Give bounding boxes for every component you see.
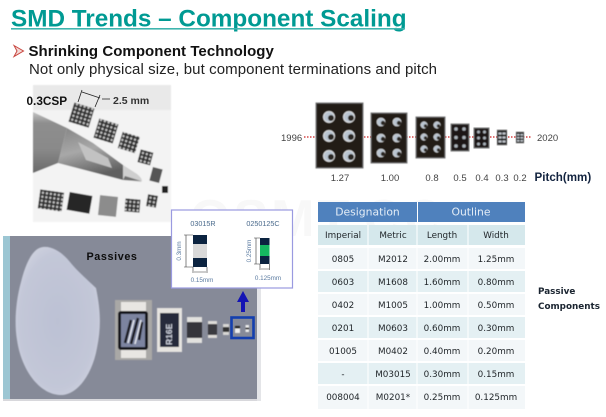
row 0805 [332, 255, 514, 265]
row 0805: 1.25mm [478, 255, 514, 265]
pitch values [331, 173, 527, 184]
axis label: pitch: Pitch(mm) [534, 171, 591, 184]
chip 0.8 [416, 117, 445, 158]
capacitor drawing: 0.25mm [246, 240, 253, 262]
heading: shrinking component technology: Shrinking Component Technology [28, 43, 274, 60]
text block: subheading: Not only physical size, but component terminations and pitch [29, 61, 437, 78]
row 0201 [332, 324, 514, 334]
row 01005: 0.20mm [478, 347, 514, 357]
title: SMD Trends – Component Scaling [11, 6, 407, 32]
packages [38, 103, 168, 217]
resistor drawing: 0.3mm [176, 241, 183, 261]
row 0201: 0.60mm [424, 324, 460, 334]
chip 0.3 [497, 130, 507, 145]
capacitor drawing [246, 238, 281, 282]
pitch values: 1.00 [381, 173, 399, 184]
table column headers [318, 225, 525, 245]
dimension marker: 2.5 mm: 2.5 mm [113, 95, 149, 107]
chip 0.2 [516, 132, 524, 143]
table column headers: Metric [379, 231, 407, 241]
label: passive components: Passive [538, 287, 575, 297]
table header: Designation [335, 206, 400, 218]
highlight box: smallest sizes [232, 318, 254, 338]
resistor drawing: 0.15mm [191, 277, 213, 284]
row 0201: M0603 [378, 324, 408, 334]
passive component sizes: R16E [164, 323, 174, 345]
row M03015: 0.15mm [478, 370, 514, 380]
row 0201: 0201 [332, 324, 354, 334]
row M03015: 0.30mm [424, 370, 460, 380]
row 0402: 1.00mm [424, 301, 460, 311]
row 0402: M1005 [378, 301, 408, 311]
label: 0.3CSP: 0.3CSP [26, 94, 67, 108]
row 008004 [326, 393, 517, 403]
row 0603: 0603 [332, 278, 354, 288]
label: passive components [538, 287, 600, 312]
watermark: OSMT.CC [190, 190, 445, 248]
icon: bullet arrowhead [14, 46, 24, 56]
pen body [33, 112, 67, 173]
pitch values: 1.27 [331, 173, 349, 184]
table column headers: Width [483, 231, 509, 241]
row 0603: 1.60mm [424, 278, 460, 288]
chip 1.00 [371, 113, 407, 163]
table: passive component designations [318, 202, 525, 409]
row 0603 [332, 278, 514, 288]
row 0805: M2012 [378, 255, 408, 265]
row stripes [318, 225, 525, 409]
row 0603: 0.80mm [478, 278, 514, 288]
rice grain [16, 247, 100, 395]
row M03015: M03015 [375, 370, 411, 380]
chart: package pitch timeline [281, 103, 591, 184]
pitch values: 0.8 [425, 173, 439, 184]
photo: CSP packages beside a pen tip [33, 85, 171, 222]
dimension marker: 2.5 mm [78, 90, 149, 107]
table column headers: Imperial [325, 231, 361, 241]
row 0201: 0.30mm [478, 324, 514, 334]
row 008004: 0.125mm [475, 393, 517, 403]
table header [318, 202, 525, 222]
row 0402 [332, 301, 514, 311]
chip 1.27 [316, 103, 363, 168]
pitch values: 0.5 [453, 173, 467, 184]
pitch values: 0.4 [475, 173, 489, 184]
row 0805: 0805 [332, 255, 354, 265]
row 01005: 0.40mm [424, 347, 460, 357]
row 008004: 008004 [326, 393, 360, 403]
year 2020: 2020 [537, 133, 558, 144]
year 1996: 1996 [281, 133, 302, 144]
row 008004: 0.25mm [424, 393, 460, 403]
row 0402: 0.50mm [478, 301, 514, 311]
row 0402: 0402 [332, 301, 354, 311]
table column headers: Length [427, 231, 457, 241]
photo: passives beside grain of rice [3, 236, 261, 401]
row 008004: M0201* [376, 393, 411, 403]
row 0805: 2.00mm [424, 255, 460, 265]
row 01005: 01005 [329, 347, 357, 357]
row M03015: - [341, 370, 345, 380]
inset: 03015 and 0250125 dimensions [172, 210, 292, 288]
passive component sizes [115, 300, 249, 360]
chip 0.4 [474, 128, 489, 148]
row 01005: M0402 [378, 347, 408, 357]
pitch values: 0.3 [495, 173, 509, 184]
label: 0250125C: 0250125C [246, 219, 280, 228]
pitch values: 0.2 [513, 173, 527, 184]
label: 03015R: 03015R [190, 219, 216, 228]
row M03015 [341, 370, 514, 380]
resistor drawing [176, 235, 213, 284]
chip 0.5 [451, 124, 469, 151]
table header: Outline [451, 206, 491, 218]
capacitor drawing: 0.125mm [255, 275, 281, 282]
label: passives: Passives [86, 251, 138, 263]
row 01005 [329, 347, 514, 357]
row 0603: M1608 [378, 278, 408, 288]
label: passive components: Components [538, 302, 600, 312]
arrow: to inset [237, 291, 249, 312]
